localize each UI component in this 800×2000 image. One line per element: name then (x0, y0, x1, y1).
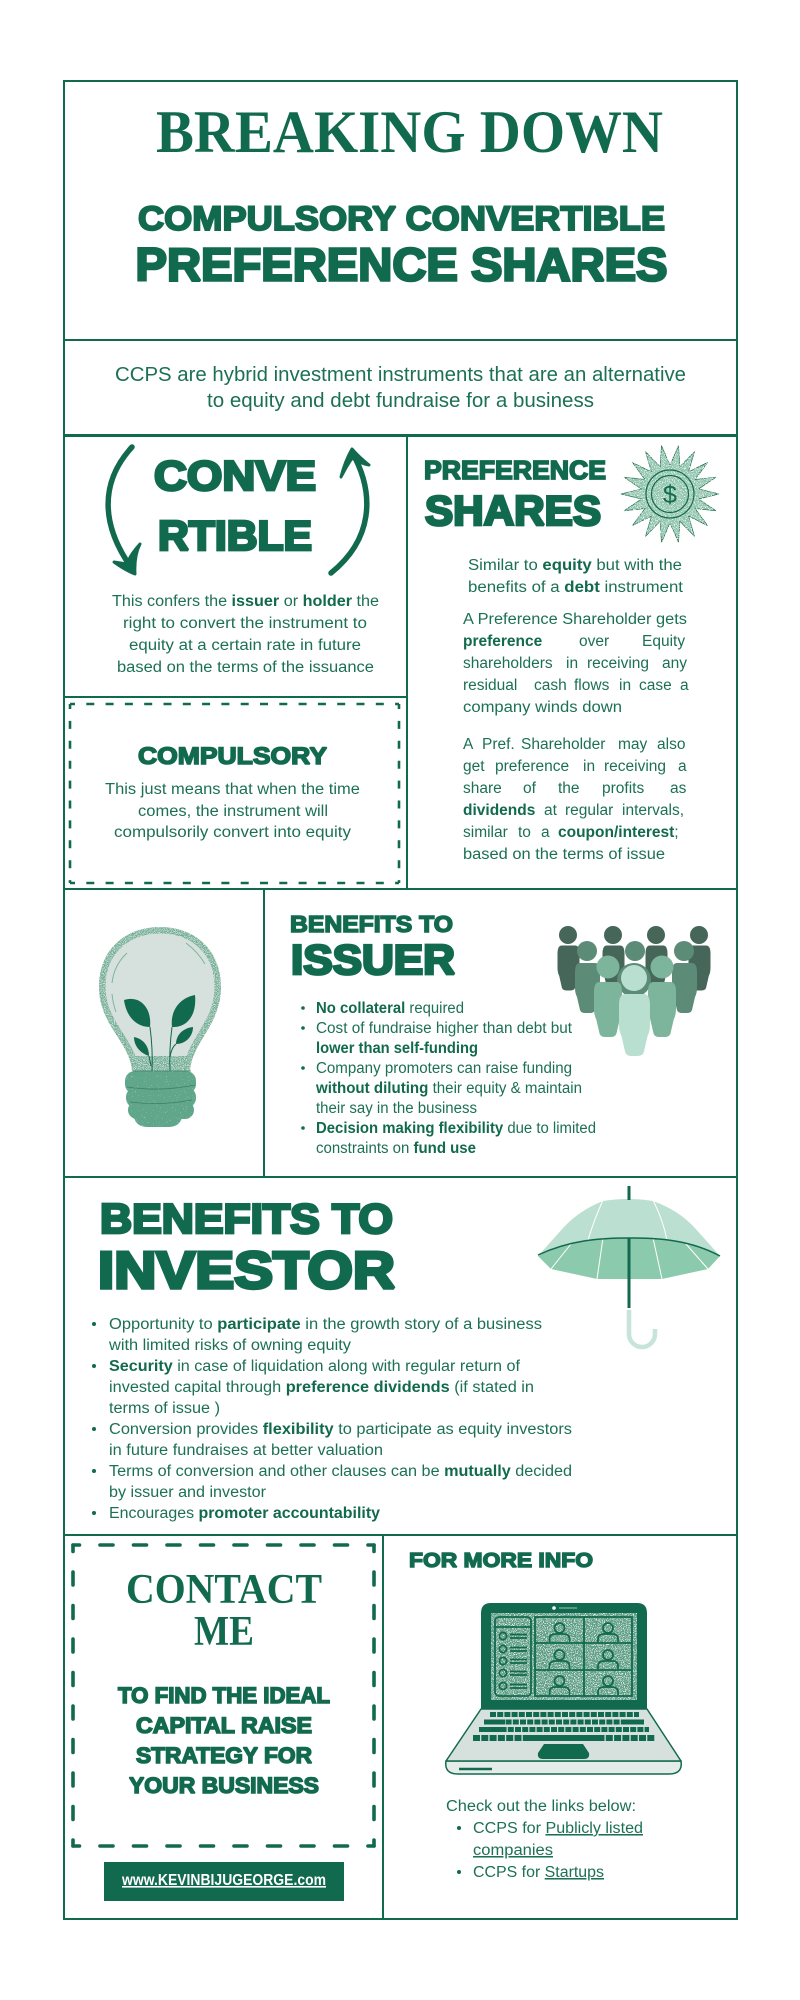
text: preference paragraph: in (566, 655, 578, 672)
panel: title (64, 81, 737, 340)
panel: preference shares (407, 436, 737, 889)
text: dividends paragraph (463, 736, 687, 863)
list: investor benefits: Terms of conversion and other clauses can be mutually decided (109, 1463, 572, 1480)
heading: preference: PREFERENCE (424, 455, 606, 485)
text: convertible description: right to convert the instrument to (123, 615, 367, 632)
text: links list (446, 1798, 643, 1881)
text: links list: companies (473, 1842, 553, 1859)
text: preference paragraph: residual (463, 677, 517, 694)
icon: laptop with video call (446, 1603, 681, 1774)
list: investor benefits: Opportunity to participate in the growth story of a business (109, 1316, 542, 1333)
list: investor benefits: Conversion provides flexibility to participate as equity investors (109, 1421, 572, 1438)
text: dividends paragraph: of (523, 780, 537, 797)
text: dividends paragraph: in (583, 758, 595, 775)
list: issuer benefits: Cost of fundraise higher than debt but (316, 1020, 573, 1037)
text: dividends paragraph: may (618, 736, 648, 753)
text: links list: Check out the links below: (446, 1798, 636, 1815)
list: investor benefits: with limited risks of owning equity (108, 1337, 351, 1354)
heading: for more info: FOR MORE INFO (409, 1549, 593, 1572)
dashed box (70, 704, 399, 883)
panel: benefits to investor (64, 1177, 737, 1535)
dashed box (73, 1545, 374, 1846)
text: preference paragraph: preference (463, 633, 543, 650)
list: investor benefits: invested capital through preference dividends (if stated in (109, 1379, 534, 1396)
text: dividends paragraph: profits (602, 780, 644, 797)
text: preference paragraph: over (579, 633, 609, 650)
icon: left curved arrow (108, 447, 140, 574)
list: issuer benefits: No collateral required (316, 1000, 464, 1017)
heading: me: ME (194, 1609, 254, 1655)
text: preference paragraph: shareholders (463, 655, 553, 672)
text: preference paragraph: receiving (587, 655, 649, 672)
panel: definition (64, 340, 737, 435)
text: dividends paragraph: also (657, 736, 685, 753)
text: dividends paragraph: dividends (463, 802, 535, 819)
list: issuer benefits: their say in the business (316, 1100, 477, 1117)
text: dividends paragraph: ; (674, 824, 679, 841)
list: issuer benefits: without diluting their equity & maintain (315, 1080, 582, 1097)
text: call to action: CAPITAL RAISE (136, 1713, 312, 1738)
text: dividends paragraph: to (518, 824, 531, 841)
text: dividends paragraph: Shareholder (521, 736, 605, 753)
text: dividends paragraph: receiving (604, 758, 666, 775)
text: dividends paragraph: coupon/interest (558, 824, 674, 841)
text: links list: CCPS for Startups (473, 1864, 604, 1881)
text: call to action: TO FIND THE IDEAL (118, 1683, 330, 1708)
text: preference paragraph: a (680, 677, 689, 694)
text: dividends paragraph: the (558, 780, 580, 797)
text: dividends paragraph: a (541, 824, 550, 841)
text: compulsory description: comes, the instrument will (138, 803, 328, 820)
list: issuer benefits: Company promoters can raise funding (316, 1060, 572, 1077)
text: dividends paragraph: preference (495, 758, 569, 775)
text: preference paragraph (463, 611, 689, 716)
text: convertible description: equity at a certain rate in future (129, 637, 361, 654)
icon: dollar sunburst: $ (663, 481, 677, 509)
heading: investor: INVESTOR (98, 1242, 395, 1300)
heading: contact: CONTACT (126, 1567, 322, 1613)
list: investor benefits (92, 1316, 572, 1522)
panel: convertible (64, 436, 407, 697)
text: dividends paragraph: similar (463, 824, 508, 841)
list: investor benefits: by issuer and investor (109, 1484, 266, 1501)
text: call to action: YOUR BUSINESS (129, 1773, 319, 1798)
list: issuer benefits (301, 1000, 596, 1157)
icon: dollar sunburst (621, 446, 719, 542)
list: investor benefits: in future fundraises at better valuation (109, 1442, 383, 1459)
text: dividends paragraph: Pref. (482, 736, 515, 753)
panel: compulsory (64, 697, 407, 889)
icon: light bulb with plant (99, 927, 221, 1127)
text: preference paragraph: any (662, 655, 687, 672)
heading: benefits to: BENEFITS TO (100, 1195, 393, 1242)
heading: conve: CONVE (154, 452, 316, 499)
text: call to action: STRATEGY FOR (136, 1743, 312, 1768)
text: links list: CCPS for Publicly listed (473, 1820, 643, 1837)
text: call to action (118, 1683, 330, 1798)
list: investor benefits: terms of issue ) (109, 1400, 220, 1417)
text: dividends paragraph: intervals, (622, 802, 684, 819)
text: preference paragraph: Equity (642, 633, 685, 650)
text: convertible description: This confers the issuer or holder the (112, 593, 379, 610)
icon: umbrella (538, 1186, 720, 1347)
list: issuer benefits: lower than self-funding (316, 1040, 478, 1057)
text: equity and debt summary: Similar to equity but with the (468, 557, 682, 574)
text: definition line 2: to equity and debt fundraise for a business (207, 390, 594, 412)
button: website (104, 1862, 344, 1901)
text: preference paragraph: company winds down (463, 699, 622, 716)
panel: for more info (383, 1535, 737, 1919)
list: issuer benefits: constraints on fund use (316, 1140, 476, 1157)
icon: group of people (558, 926, 710, 1056)
list: issuer benefits: Decision making flexibility due to limited (316, 1120, 596, 1137)
text: convertible description (112, 593, 379, 676)
text: equity and debt summary (468, 557, 684, 596)
heading: rtible: RTIBLE (158, 512, 312, 559)
list: investor benefits: Encourages promoter accountability (109, 1505, 380, 1522)
text: dividends paragraph: as (670, 780, 687, 797)
text: compulsory description (105, 781, 360, 841)
text: preference paragraph: in (619, 677, 631, 694)
heading: benefits to: BENEFITS TO (290, 911, 453, 937)
text: preference paragraph: flows (574, 677, 610, 694)
heading: compulsory: COMPULSORY (138, 743, 327, 770)
text: dividends paragraph: get (463, 758, 485, 775)
panel: benefits to issuer (264, 889, 737, 1177)
panel: light bulb (63, 890, 221, 1176)
heading: shares: SHARES (425, 487, 601, 534)
button: website: www.KEVINBIJUGEORGE.com (121, 1872, 326, 1889)
heading: preference shares: PREFERENCE SHARES (136, 238, 668, 290)
heading: issuer: ISSUER (291, 936, 455, 983)
text: dividends paragraph: a (678, 758, 687, 775)
text: compulsory description: This just means that when the time (105, 781, 360, 798)
icon: right curved arrow (331, 449, 369, 573)
title: breaking down: BREAKING DOWN (156, 99, 663, 165)
text: dividends paragraph: based on the terms of issue (463, 846, 665, 863)
text: compulsory description: compulsorily convert into equity (114, 824, 351, 841)
heading: compulsory convertible: COMPULSORY CONVERTIBLE (138, 200, 665, 238)
panel: contact me (64, 1535, 383, 1919)
text: dividends paragraph: regular (565, 802, 613, 819)
text: equity and debt summary: benefits of a debt instrument (468, 579, 684, 596)
text: preference paragraph: A Preference Shareholder gets (463, 611, 687, 628)
text: dividends paragraph: share (463, 780, 502, 797)
text: definition line 1: CCPS are hybrid investment instruments that are an alternative (115, 364, 686, 386)
text: preference paragraph: cash (534, 677, 567, 694)
text: preference paragraph: case (639, 677, 672, 694)
text: dividends paragraph: at (544, 802, 558, 819)
list: investor benefits: Security in case of liquidation along with regular return of (109, 1358, 521, 1375)
text: dividends paragraph: A (463, 736, 474, 753)
text: convertible description: based on the terms of the issuance (117, 659, 374, 676)
